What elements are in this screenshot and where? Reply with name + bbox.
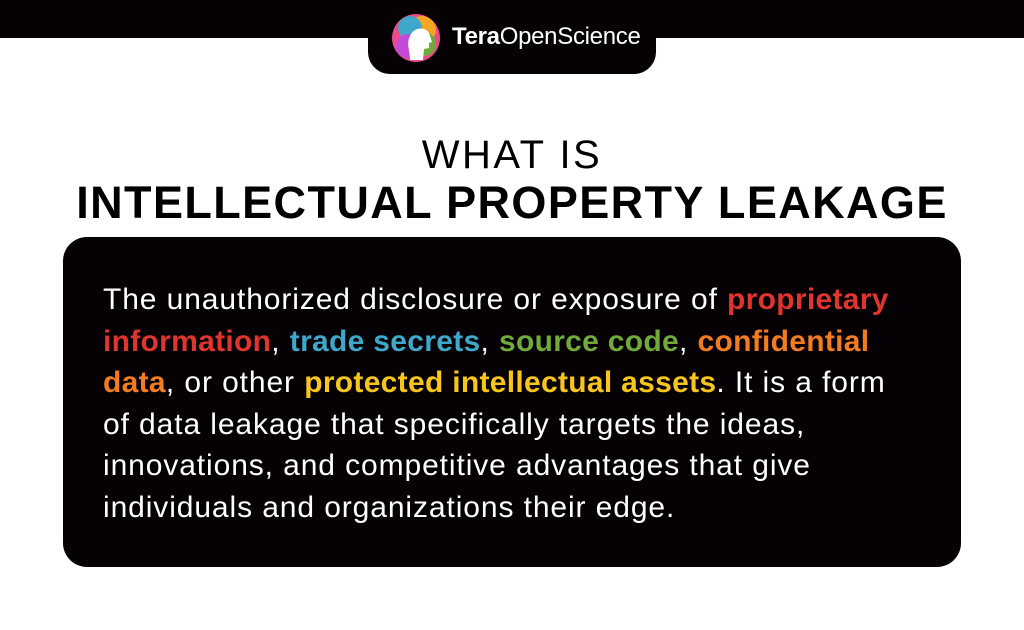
- definition text: of data leakage that specifically targets the ideas,: [103, 408, 805, 440]
- definition text: [103, 283, 889, 524]
- definition text: individuals and organizations their edge.: [103, 490, 675, 524]
- brand name: TeraOpenScience: [452, 23, 641, 50]
- definition text: data, or other protected intellectual assets. It is a form: [103, 366, 886, 399]
- definition text: information, trade secrets, source code, confidential: [103, 324, 869, 358]
- icon: logo: [392, 14, 440, 62]
- panel: definition: [63, 237, 961, 567]
- definition text: innovations, and competitive advantages that give: [103, 449, 811, 482]
- logo tab: [368, 0, 656, 74]
- title line 1: WHAT IS: [422, 133, 602, 177]
- title line 2: INTELLECTUAL PROPERTY LEAKAGE: [76, 177, 948, 228]
- definition text: The unauthorized disclosure or exposure of proprietary: [103, 283, 889, 316]
